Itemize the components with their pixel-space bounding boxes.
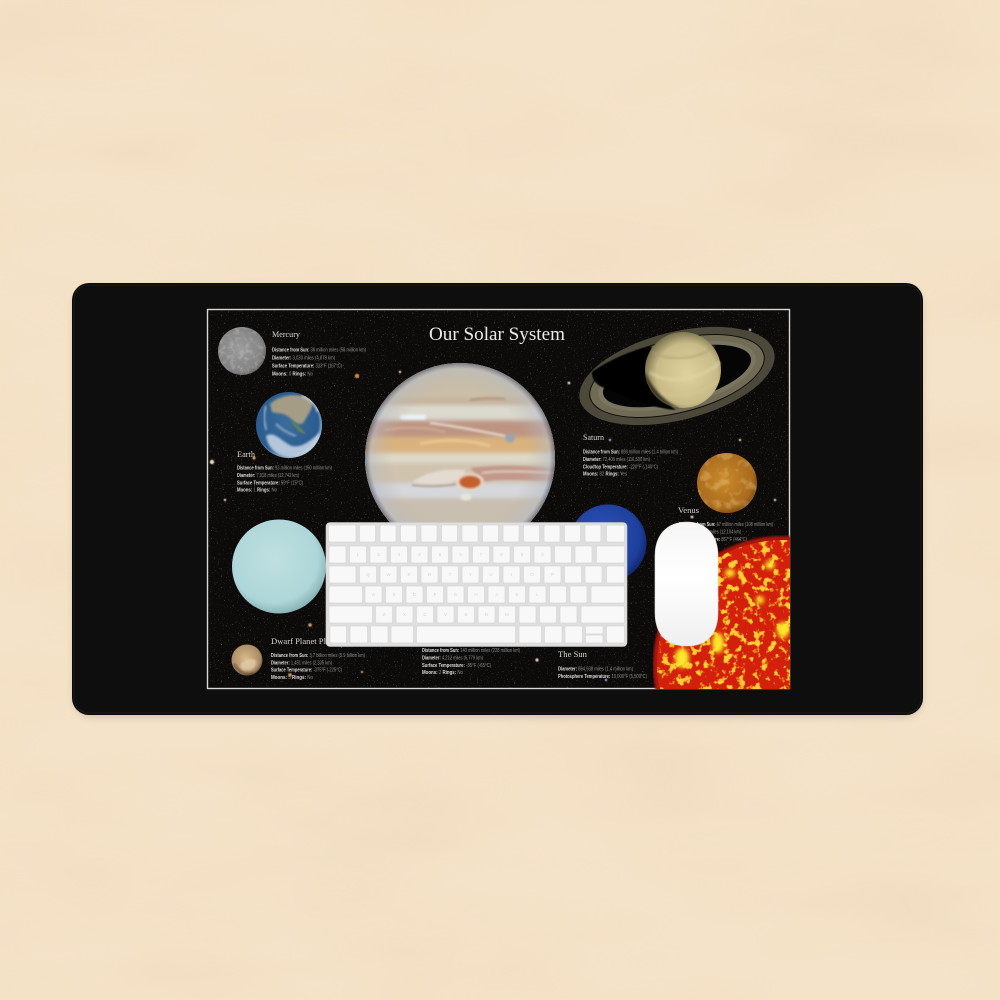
- poster: star field background with white border: [207, 309, 790, 689]
- text block: Venus: Distance from Sun: 67 million miles (108 million km): [679, 522, 773, 528]
- text block: Dwarf Planet Pluto: Distance from Sun: 3.7 billion miles (5.9 billion km): [271, 653, 365, 659]
- text block: Venus: Venus: [678, 505, 699, 515]
- text block: Mars: Distance from Sun: 140 million miles (228 million km): [422, 648, 520, 654]
- keys: QWERTY row: P: [551, 572, 554, 577]
- keys: number row: 0: [541, 552, 544, 557]
- text block: Earth: Distance from Sun: 93 million miles (150 million km): [237, 466, 332, 472]
- keys: number row: 3: [398, 552, 401, 557]
- planet: Earth: [256, 392, 322, 458]
- keys: home row: S: [392, 592, 396, 597]
- keys: number row: [329, 546, 624, 563]
- text block: Earth: Diameter: 7,918 miles (12,742 km): [237, 473, 299, 479]
- text block: Dwarf Planet Pluto: Moons: 5 Rings: No: [271, 675, 313, 681]
- keys: number row: 4: [418, 552, 421, 557]
- keys: QWERTY row: E: [407, 572, 411, 577]
- keys: QWERTY row: W: [386, 572, 391, 577]
- keys: bottom letter row: Z: [383, 612, 386, 617]
- text block: Mars: Diameter: 4,212 miles (6,779 km): [422, 656, 483, 662]
- text block: Saturn: Moons: 82 Rings: Yes: [583, 472, 627, 478]
- keys: QWERTY row: Q: [366, 572, 370, 577]
- text block: Earth: Earth: [237, 449, 256, 459]
- keys: number row: 8: [500, 552, 503, 557]
- keys: QWERTY row: O: [530, 572, 534, 577]
- text block: Mercury: [272, 329, 366, 378]
- planet: Uranus: [232, 520, 326, 614]
- text block: Saturn: Diameter: 72,400 miles (116,500 km): [583, 457, 650, 463]
- keys: bottom letter row: B: [464, 612, 468, 617]
- keys: number row: 5: [439, 552, 442, 557]
- text block: Saturn: Distance from Sun: 886 million miles (1.4 billion km): [583, 450, 678, 456]
- keys: bottom letter row: M: [505, 612, 509, 617]
- keys: bottom letter row: N: [485, 612, 488, 617]
- text block: The Sun: [558, 649, 647, 680]
- keys: QWERTY row: Y: [469, 572, 472, 577]
- text block: Mars: [422, 648, 520, 676]
- text block: Mars: Surface Temperature: -85°F (-65°C): [422, 663, 491, 669]
- text block: The Sun: Photosphere Temperature: 10,000°F (5,500°C): [558, 674, 647, 680]
- keys: bottom letter row: X: [403, 612, 406, 617]
- text block: Dwarf Planet Pluto: [271, 636, 365, 681]
- keys: home row: [329, 586, 624, 603]
- text block: Saturn: Cloudtop Temperature: -220°F (-140°C): [583, 464, 658, 470]
- planet: Mercury: [218, 327, 266, 375]
- text block: Venus: Diameter: 7,521 miles (12,104 km): [679, 530, 741, 536]
- keys: QWERTY row: R: [428, 572, 432, 577]
- title: Our Solar System: [429, 325, 566, 345]
- keys: home row: J: [495, 592, 498, 597]
- text block: Mercury: Distance from Sun: 36 million miles (58 million km): [272, 348, 366, 354]
- text block: Dwarf Planet Pluto: Dwarf Planet Pluto: [271, 636, 337, 646]
- text block: Dwarf Planet Pluto: Diameter: 1,451 miles (2,335 km): [271, 660, 332, 666]
- keys: number row: 1: [356, 552, 359, 557]
- keyboard: [326, 522, 627, 646]
- text block: The Sun: Diameter: 864,938 miles (1.4 million km): [558, 666, 633, 672]
- computer mouse: [655, 522, 718, 646]
- keys: QWERTY row: U: [489, 572, 493, 577]
- keys: bottom letter row: V: [444, 612, 447, 617]
- keys: number row: 6: [459, 552, 462, 557]
- text block: Mercury: Moons: 0 Rings: No: [272, 372, 313, 378]
- keys: bottom letter row: C: [423, 612, 427, 617]
- keys: function row: [328, 525, 624, 542]
- keys: bottom letter row: [329, 606, 624, 623]
- text block: Mercury: Diameter: 3,030 miles (4,878 km): [272, 356, 335, 362]
- keys: home row: D: [413, 592, 417, 597]
- keys: home row: H: [474, 592, 478, 597]
- keys: number row: 2: [377, 552, 380, 557]
- keys: home row: K: [515, 592, 519, 597]
- text block: Mars: Moons: 2 Rings: No: [422, 670, 463, 676]
- text block: Venus: [678, 505, 773, 543]
- planet: Dwarf Planet Pluto: [232, 644, 262, 676]
- keys: home row: A: [372, 592, 375, 597]
- the Sun: [653, 535, 790, 689]
- planet: Saturn with rings: [569, 309, 785, 443]
- keys: home row: G: [454, 592, 458, 597]
- text block: The Sun: The Sun: [558, 649, 588, 659]
- text block: Earth: [237, 449, 332, 494]
- keys: space bar row: [330, 626, 624, 643]
- keys: number row: 7: [480, 552, 483, 557]
- text block: Saturn: Saturn: [583, 432, 605, 442]
- planet: Venus: [697, 453, 757, 513]
- keys: QWERTY row: [329, 566, 624, 583]
- text block: Mercury: Mercury: [272, 329, 301, 339]
- keys: home row: F: [434, 592, 437, 597]
- text block: Earth: Surface Temperature: 59°F (15°C): [237, 480, 303, 486]
- keys: QWERTY row: T: [449, 572, 452, 577]
- planet: Neptune: [570, 504, 646, 582]
- text block: Saturn: [583, 432, 678, 478]
- planet: Jupiter: [365, 363, 555, 522]
- keys: QWERTY row: I: [511, 572, 512, 577]
- text block: Earth: Moons: 1 Rings: No: [237, 488, 277, 494]
- text block: Venus: Surface Temperature: 867°F (464°C): [679, 537, 747, 543]
- text block: Mercury: Surface Temperature: 333°F (167°C): [272, 364, 342, 370]
- keys: number row: 9: [521, 552, 524, 557]
- keys: home row: L: [536, 592, 539, 597]
- text block: Dwarf Planet Pluto: Surface Temperature: -375°F (-225°C): [271, 668, 342, 674]
- mouse mat: [72, 283, 923, 717]
